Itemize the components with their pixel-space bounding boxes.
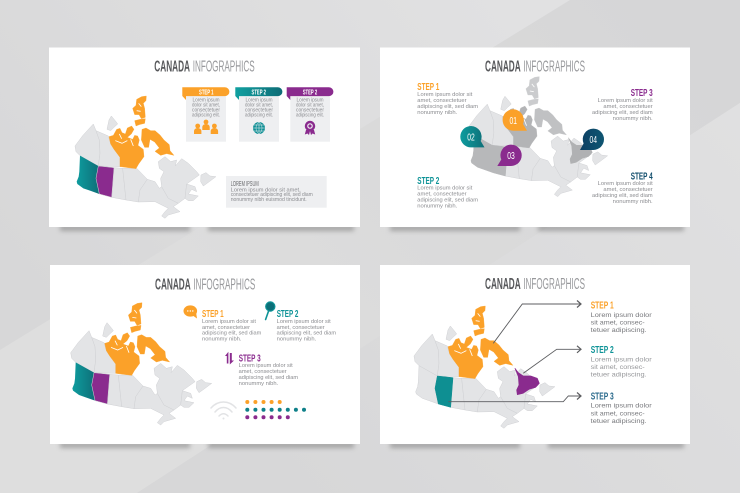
icon: up-down arrows — [225, 352, 234, 364]
title — [155, 277, 255, 294]
title: CANADA — [485, 58, 521, 76]
text: step 3: sit amet, consec- — [591, 410, 645, 417]
text: step 1: Lorem ipsum dolor — [591, 312, 652, 319]
title — [485, 58, 585, 76]
text: step 1: adipiscing elit, sed diam — [202, 331, 261, 337]
text: step 1: adipiscing elit, sed diam — [417, 104, 478, 110]
text: step 2: amet, consectetuer — [417, 192, 467, 198]
title: CANADA — [154, 58, 190, 76]
text: step 1: STEP 1 — [417, 82, 439, 93]
text: step 2: adipiscing elit, sed diam — [417, 198, 478, 204]
text: step 2: STEP 2 — [417, 176, 439, 187]
text: step 1: STEP 1 — [202, 309, 224, 320]
text: step 4: amet, consectetuer — [603, 187, 653, 193]
text: step 4: adipiscing elit, sed diam — [592, 193, 653, 199]
bubble: 01: 01 — [510, 116, 517, 127]
text: step 1: Lorem ipsum dolor sit — [202, 319, 257, 325]
text: step 3: nonummy nibh. — [239, 381, 278, 387]
text: step 3: adipiscing elit, sed diam — [239, 375, 298, 381]
title: INFOGRAPHICS — [193, 277, 255, 294]
panel: top-right slide — [380, 48, 690, 231]
text: step 3: adipiscing elit, sed diam — [592, 110, 653, 116]
card: step 2 duplicate label in purple: STEP 2 — [303, 90, 317, 96]
arrow: to step 1 — [493, 300, 581, 343]
text: step 3: STEP 3 — [591, 392, 614, 403]
text: step 1: nonummy nibh. — [202, 337, 242, 343]
card: step 2: dolor sit amet, — [245, 103, 273, 109]
text: step 3: tetuer adipiscing. — [591, 418, 647, 425]
card: step 2: STEP 2 — [252, 90, 266, 96]
callout: lorem ipsum box: LOREM IPSUM — [231, 179, 259, 188]
title: CANADA — [155, 277, 191, 294]
icon: award badge — [305, 121, 315, 135]
text: step 1: tetuer adipiscing. — [591, 327, 647, 334]
text: step 1 — [202, 309, 261, 343]
text: step 3: STEP 3 — [239, 353, 261, 364]
text: step 2: adipiscing elit, sed diam — [277, 331, 336, 337]
callout: lorem ipsum box — [226, 176, 327, 208]
arrow: to step 3 — [448, 392, 581, 402]
icon: people — [194, 120, 218, 134]
title: CANADA — [485, 276, 521, 293]
card: step 2: adipiscing elit. — [245, 112, 273, 118]
text: step 2: nonummy nibh. — [277, 337, 316, 343]
card: step 2: consectetuer — [245, 107, 273, 113]
text: step 2: nonummy nibh. — [417, 204, 457, 210]
card: step 2 duplicate label in purple: adipiscing elit. — [296, 112, 324, 118]
callout: lorem ipsum box: consectetuer adipiscing elit, sed diam — [231, 192, 313, 198]
text: step 3: STEP 3 — [631, 88, 653, 99]
text: step 3: amet, consectetuer — [603, 104, 653, 110]
text: step 1 — [417, 82, 478, 116]
panel: top-left slide — [49, 48, 360, 231]
card: step 1: dolor sit amet, — [192, 103, 220, 109]
card: step 2 — [235, 87, 282, 142]
text: step 4 — [592, 172, 653, 205]
card: step 2 duplicate label in purple: consectetuer — [296, 107, 324, 113]
dot chart — [245, 400, 306, 419]
text: step 1 — [591, 300, 652, 334]
text: step 2: Lorem ipsum dolor sit — [417, 186, 473, 192]
icon: magnifier — [266, 302, 275, 320]
card: step 2 duplicate label in purple: dolor sit amet, — [296, 103, 324, 109]
text: step 3: Lorem ipsum dolor sit — [598, 98, 653, 104]
icon: wifi — [211, 402, 236, 420]
bubble: 01 — [503, 109, 527, 131]
title — [154, 58, 255, 76]
text: step 2: STEP 2 — [591, 345, 614, 356]
card: step 2 duplicate label in purple: Lorem ipsum — [296, 98, 324, 104]
text: step 2: STEP 2 — [277, 309, 299, 320]
text: step 1: STEP 1 — [591, 300, 614, 311]
card: step 1: Lorem ipsum — [192, 98, 220, 104]
text: step 3 — [591, 392, 652, 425]
text: step 2: Lorem ipsum dolor — [591, 357, 652, 364]
text: step 4: nonummy nibh. — [613, 199, 653, 205]
map of Canada — [469, 77, 608, 197]
card: step 2 duplicate label in purple — [287, 87, 333, 142]
text: step 3 — [592, 88, 653, 122]
text: step 3 — [239, 353, 298, 387]
title: INFOGRAPHICS — [193, 58, 255, 76]
title: INFOGRAPHICS — [523, 58, 585, 76]
text: step 3: nonummy nibh. — [613, 116, 653, 122]
text: step 2 — [417, 176, 478, 210]
text: step 2: tetuer adipiscing. — [591, 372, 647, 379]
text: step 1: Lorem ipsum dolor sit — [417, 92, 473, 98]
callout: lorem ipsum box: nonummy nibh euismod tincidunt. — [231, 197, 307, 203]
bubble: 02: 02 — [467, 132, 475, 144]
icon: speech bubble — [184, 305, 197, 318]
text: step 4: Lorem ipsum dolor sit — [598, 181, 653, 187]
title — [485, 276, 585, 293]
map of Canada — [75, 96, 216, 218]
text: step 4: STEP 4 — [631, 172, 653, 183]
bubble: 03: 03 — [507, 151, 515, 162]
text: step 2: amet, consectetuer — [277, 325, 325, 331]
text: step 2 — [277, 309, 336, 343]
panel: bottom-right slide — [380, 265, 690, 448]
callout: lorem ipsum box: Lorem ipsum dolor sit amet, — [231, 187, 301, 193]
card: step 1 — [182, 87, 229, 142]
text: step 1: amet, consectetuer — [417, 98, 467, 104]
card: step 2: Lorem ipsum — [246, 98, 272, 104]
arrow: to step 2 — [523, 346, 581, 373]
title: INFOGRAPHICS — [523, 276, 585, 293]
map of Canada — [71, 303, 212, 425]
panel: bottom-left slide — [50, 265, 360, 448]
map of Canada — [414, 306, 555, 428]
bubble: 03 — [497, 145, 522, 166]
text: step 1: sit amet, consec- — [591, 320, 645, 327]
card: step 1: adipiscing elit. — [192, 112, 220, 118]
text: step 1: nonummy nibh. — [417, 110, 457, 116]
bubble: 02 — [460, 126, 484, 147]
bubble: 04 — [580, 129, 604, 150]
card: step 1: consectetuer — [192, 107, 220, 113]
text: step 3: Lorem ipsum dolor — [591, 403, 652, 410]
text: step 2: Lorem ipsum dolor sit — [277, 319, 331, 325]
bubble: 04: 04 — [590, 135, 597, 146]
text: step 3: amet, consectetuer — [239, 369, 287, 375]
card: step 1: STEP 1 — [199, 90, 214, 96]
text: step 2: sit amet, consec- — [591, 364, 645, 371]
icon: globe — [253, 122, 265, 134]
text: step 2 — [591, 345, 652, 379]
text: step 1: amet, consectetuer — [202, 325, 250, 331]
text: step 3: Lorem ipsum dolor sit — [239, 363, 293, 369]
